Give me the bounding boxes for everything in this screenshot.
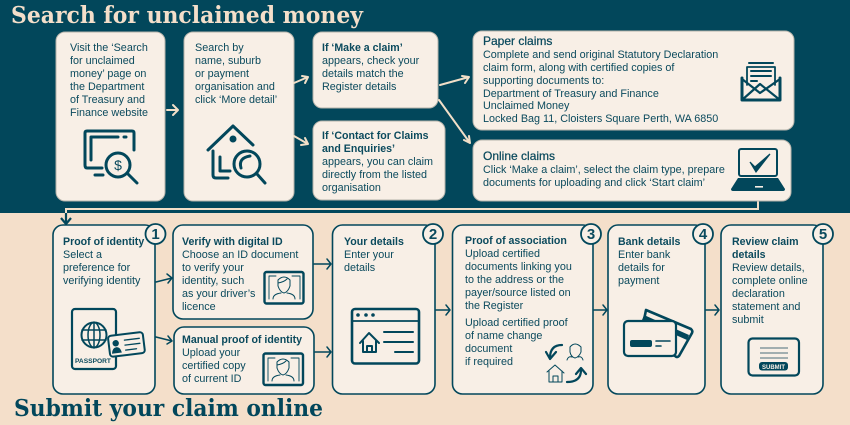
text: manual proof: of current ID [182, 373, 242, 385]
arrow: identity to manual [156, 336, 172, 344]
badge: step 5 [813, 224, 833, 244]
text: proof of identity: preference for [63, 262, 131, 274]
badge: step 3: 3 [587, 226, 595, 243]
text: proof of association: Upload certified proof [465, 317, 569, 329]
badge: step 4 [693, 224, 713, 244]
panel: bank details [608, 225, 705, 394]
text: paper claims body: Department of Treasury and Finance [483, 88, 659, 100]
badge: step 2 [423, 224, 443, 244]
arrow: make a claim to online claims [439, 100, 470, 143]
icon: submit form: SUBMIT [762, 364, 785, 371]
badge: step 5: 5 [819, 226, 827, 243]
text: bank details: payment [618, 275, 659, 287]
text: visit instructions: of Treasury and [70, 94, 145, 106]
text: visit instructions: for unclaimed [70, 55, 135, 67]
text: review claim details: submit [732, 314, 764, 326]
icon: envelope [742, 63, 780, 100]
text: search instructions: organisation and [195, 81, 275, 93]
icon: portrait on tablet [264, 272, 304, 304]
text: online claims body: Click ‘Make a claim’, select the claim type, prepare [483, 164, 725, 176]
text: visit instructions: Finance website [70, 107, 148, 119]
text: paper claims title: Paper claims [483, 34, 552, 48]
text: digital ID: as your driver’s [182, 288, 256, 300]
icon: submit form [748, 338, 799, 376]
text: paper claims body: Unclaimed Money [483, 100, 570, 112]
arrow: bank to review [706, 305, 719, 315]
arrow: association to bank [594, 305, 607, 315]
arrow: details to association [436, 305, 450, 315]
panel: paper claims [473, 31, 794, 130]
panel: make a claim [313, 32, 438, 108]
text: digital ID: licence [182, 301, 216, 313]
text: proof of association: of name change [465, 330, 542, 342]
badge: step 2: 2 [429, 226, 437, 243]
text: online claims title: Online claims [483, 149, 555, 163]
text: proof of association: documents linking you [465, 261, 572, 273]
arrow: search to make a claim [294, 76, 308, 83]
text: paper claims body: supporting documents to: [483, 75, 604, 87]
icon: bank cards [624, 310, 692, 357]
connector: online claims to proof of identity [61, 201, 758, 224]
panel: proof of identity [53, 225, 155, 394]
text: your details: Enter your [344, 249, 394, 261]
arrow: digital ID to details [314, 259, 331, 269]
text: make a claim instructions: If ‘Make a claim’ [322, 42, 403, 54]
text: review claim details: Review details, [732, 262, 805, 274]
text: review claim details: details [732, 249, 766, 261]
panel: online claims [473, 140, 791, 201]
icon: passport and id card [72, 309, 145, 369]
text: search instructions: click ‘More detail’ [195, 94, 277, 106]
text: digital ID: Verify with digital ID [182, 236, 283, 248]
text: proof of association: document [465, 343, 512, 355]
text: review claim details: complete online [732, 275, 808, 287]
text: digital ID: identity, such [182, 275, 244, 287]
text: search instructions: name, suburb [195, 55, 261, 67]
text: make a claim instructions: appears, check your [322, 55, 420, 67]
arrow: visit to search [167, 105, 178, 115]
panel: verify with digital ID [173, 225, 313, 319]
icon: monitor with dollar magnifier: $ [114, 157, 122, 173]
panel: your details [332, 225, 435, 394]
badge: step 3 [581, 224, 601, 244]
panel: search by name [184, 32, 294, 201]
text: manual proof: Upload your [182, 347, 241, 359]
text: proof of association: Upload certified [465, 248, 540, 260]
text: contact instructions: directly from the listed [322, 169, 427, 181]
text: make a claim instructions: Register details [322, 81, 397, 93]
text: digital ID: to verify your [182, 262, 244, 274]
text: contact instructions: organisation [322, 182, 381, 194]
text: bank details: details for [618, 262, 665, 274]
text: visit instructions: money’ page on [70, 68, 146, 80]
text: bank details: Enter bank [618, 249, 671, 261]
badge: step 4: 4 [699, 226, 708, 243]
text: proof of association: payer/source listed on [465, 287, 571, 299]
text: proof of identity: Proof of identity [63, 236, 144, 248]
text: online claims body: documents for uploading and click ‘Start claim’ [483, 177, 705, 189]
text: your details: details [344, 262, 376, 274]
icon: person and house exchange [546, 344, 586, 382]
text: bank details: Bank details [618, 236, 681, 248]
heading: search for unclaimed money: Search for unclaimed money [11, 2, 364, 29]
text: make a claim instructions: details match the [322, 68, 404, 80]
text: visit instructions: the Department [70, 81, 144, 93]
arrow: search to contact [294, 136, 308, 145]
text: manual proof: Manual proof of identity [182, 334, 302, 346]
icon: portrait on tablet [264, 354, 303, 385]
panel: proof of association [452, 225, 593, 394]
text: review claim details: statement and [732, 301, 800, 313]
text: review claim details: declaration [732, 288, 785, 300]
text: visit instructions: Visit the ‘Search [70, 42, 148, 54]
heading: submit your claim online: Submit your claim online [14, 395, 323, 422]
text: contact instructions: appears, you can claim [322, 156, 433, 168]
panel: visit the search page [56, 32, 165, 201]
text: search instructions: or payment [195, 68, 249, 80]
text: proof of association: the Register [465, 300, 524, 312]
panel: contact for claims [313, 121, 445, 200]
text: proof of identity: verifying identity [63, 275, 141, 287]
text: digital ID: Choose an ID document [182, 249, 298, 261]
text: contact instructions: If ‘Contact for Claims [322, 130, 429, 142]
text: proof of association: to the address or the [465, 274, 564, 286]
arrow: identity to digital ID [156, 274, 172, 283]
text: paper claims body: Locked Bag 11, Cloisters Square Perth, WA 6850 [483, 113, 718, 125]
icon: browser window with house [352, 309, 419, 364]
text: proof of association: Proof of association [465, 235, 567, 247]
text: paper claims body: claim form, along with certified copies of [483, 62, 675, 74]
panel: review claim details [721, 225, 823, 394]
text: proof of association: if required [465, 356, 513, 368]
background: upper section [0, 0, 850, 213]
text: your details: Your details [344, 236, 404, 248]
text: paper claims body: Complete and send original Statutory Declaration [483, 49, 718, 61]
text: contact instructions: and Enquiries’ [322, 143, 395, 155]
icon: monitor with dollar magnifier [85, 131, 137, 183]
text: review claim details: Review claim [732, 236, 799, 248]
text: search instructions: Search by [195, 42, 244, 54]
panel: manual proof of identity [174, 327, 314, 394]
arrow: manual to details [315, 347, 331, 357]
badge: step 1 [146, 224, 166, 244]
text: manual proof: certified copy [182, 360, 246, 372]
icon: house with magnifier [208, 126, 265, 183]
badge: step 1: 1 [151, 226, 160, 243]
arrow: make a claim to paper claims [440, 76, 469, 85]
icon: laptop with tick [731, 149, 785, 191]
icon: passport and id card: PASSPORT [75, 358, 111, 365]
text: proof of identity: Select a [63, 249, 102, 261]
